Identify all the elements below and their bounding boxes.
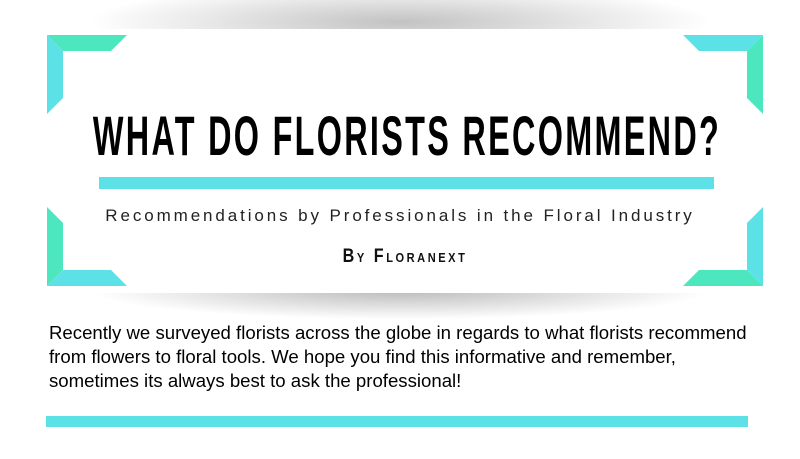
subtitle: Recommendations by Professionals in the Floral Industry <box>105 206 695 225</box>
corner: bottom-left <box>47 207 127 286</box>
intro paragraph: Recently we surveyed florists across the globe in regards to what florists recommend <box>49 322 747 343</box>
corner: top-right <box>683 35 763 114</box>
title: WHAT DO FLORISTS RECOMMEND? <box>93 104 721 167</box>
intro paragraph: from flowers to floral tools. We hope you find this informative and remember, <box>49 346 676 367</box>
card <box>20 29 780 293</box>
corner: top-left <box>47 35 127 114</box>
top shadow <box>60 0 740 40</box>
intro paragraph: sometimes its always best to ask the professional! <box>49 370 461 391</box>
intro paragraph <box>49 322 747 391</box>
bottom shadow <box>60 272 740 322</box>
corner: bottom-right <box>683 207 763 286</box>
title underline bar <box>99 177 714 189</box>
bottom bar <box>46 416 748 427</box>
byline: By Floranext <box>343 246 467 267</box>
